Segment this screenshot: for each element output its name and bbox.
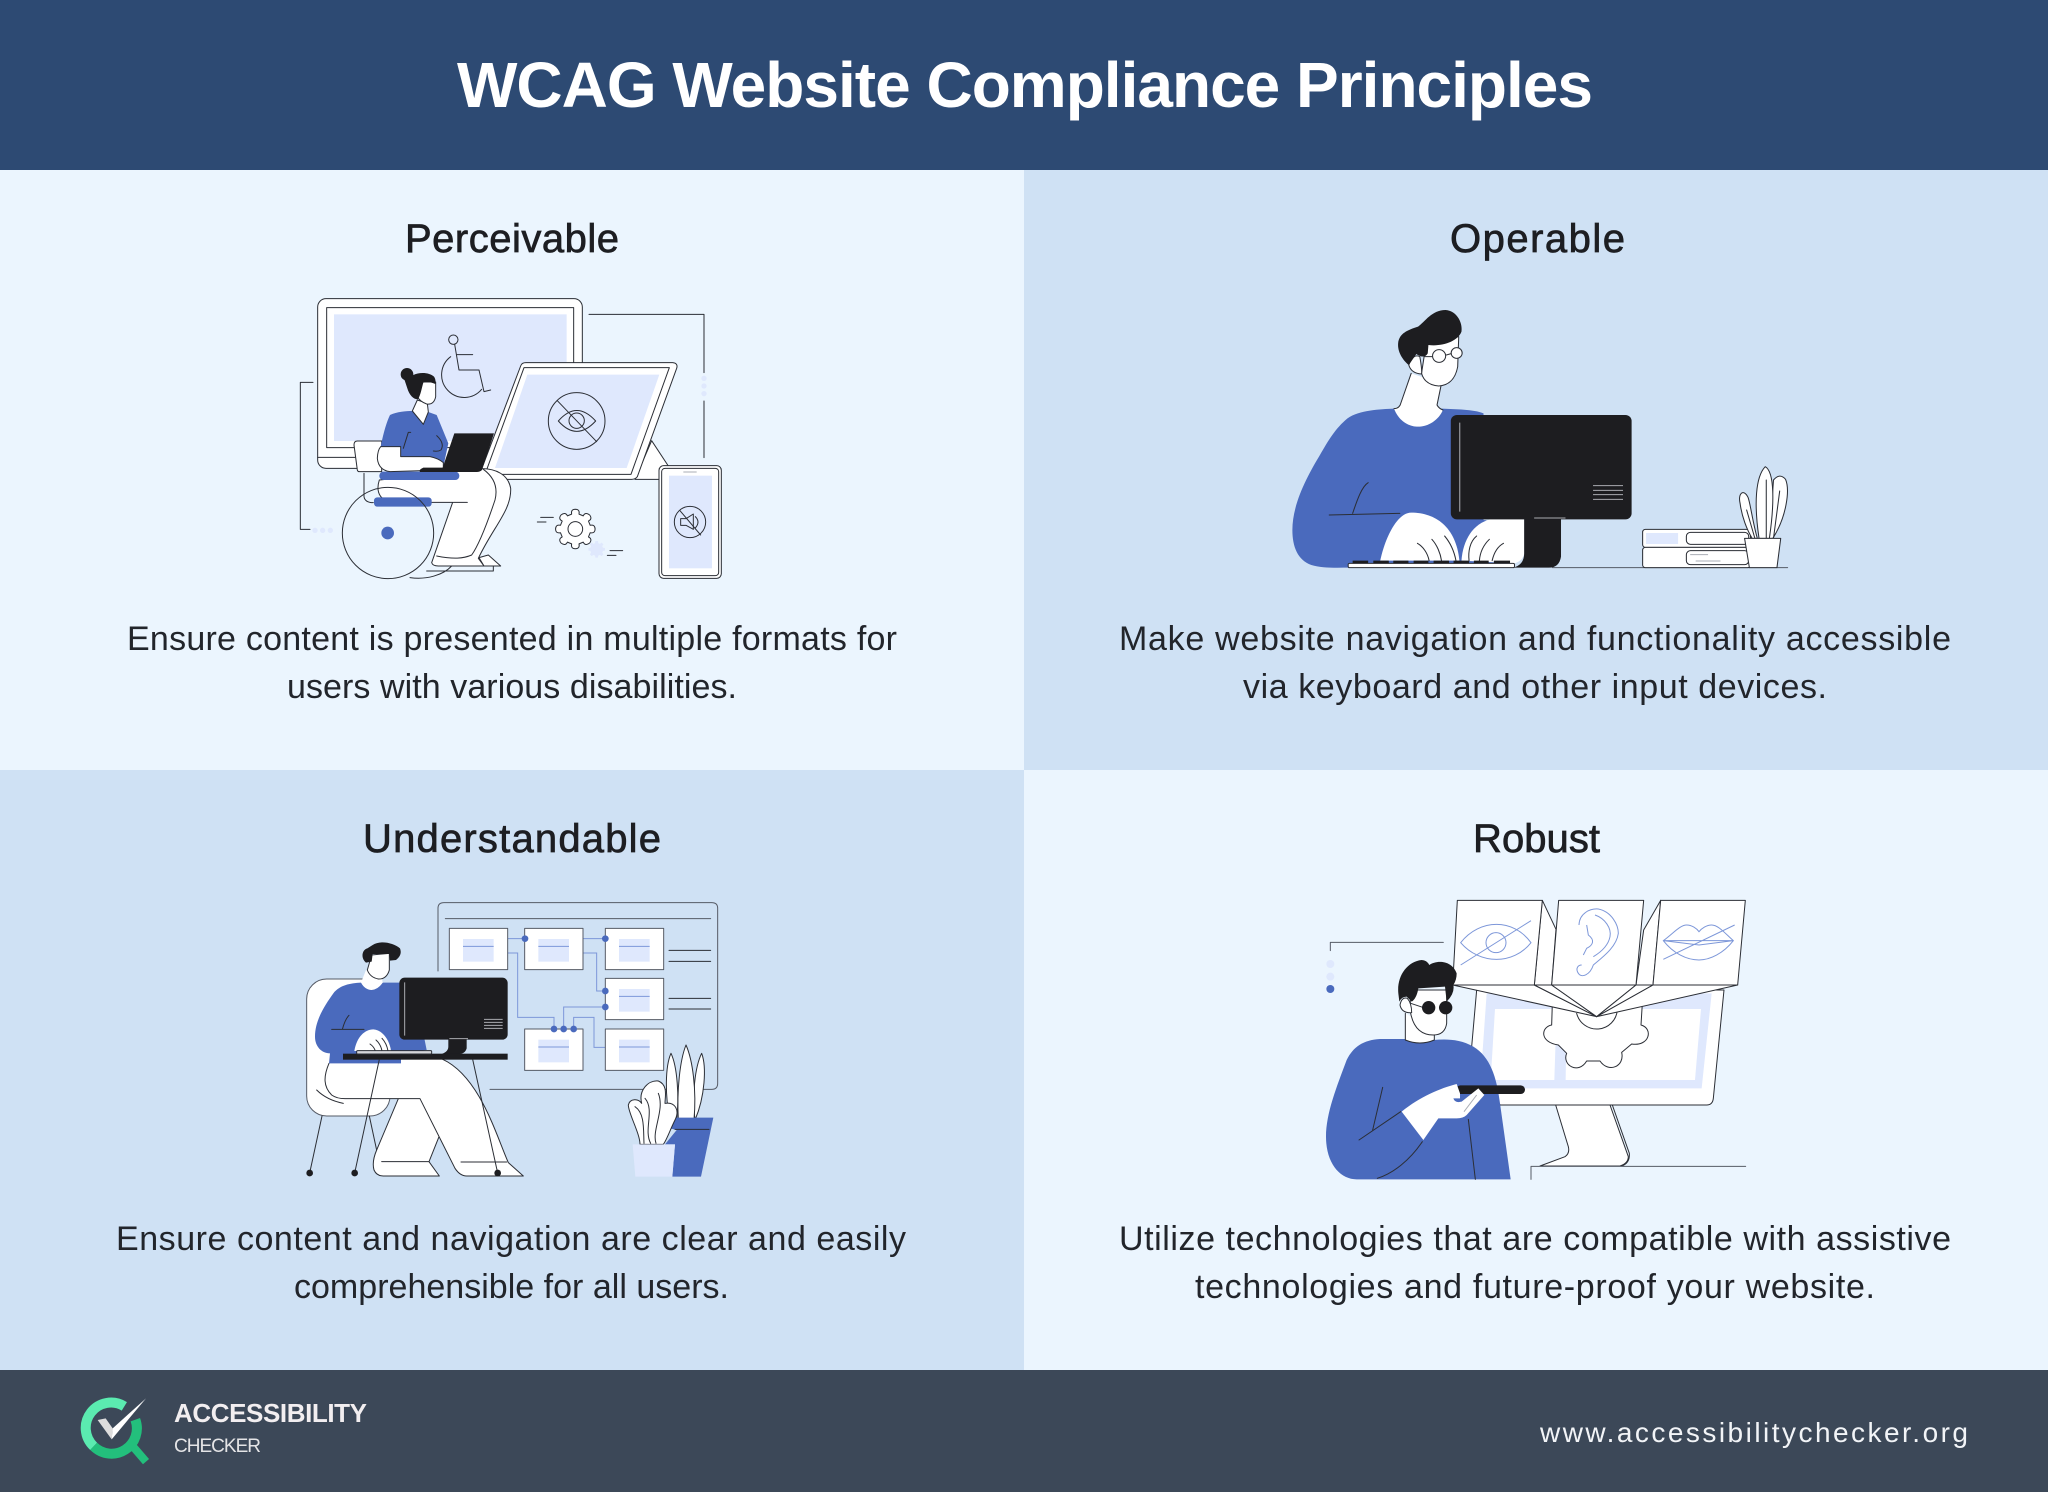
heading: understandable: Understandable — [363, 817, 661, 861]
man torso — [1326, 1039, 1511, 1179]
desk — [343, 1054, 508, 1060]
heading: robust: Robust — [1473, 817, 1600, 861]
logo wordmark — [174, 1398, 367, 1457]
plant — [1740, 467, 1787, 568]
description: robust — [1119, 1220, 1951, 1306]
icon: wheelchair symbol — [442, 335, 491, 397]
header band — [0, 0, 2048, 170]
ear — [1400, 998, 1412, 1013]
description: perceivable — [127, 620, 897, 706]
description: robust: technologies and future-proof your website. — [1195, 1268, 1875, 1306]
sleeve lines — [332, 1015, 364, 1029]
monitor stand and base — [1531, 1105, 1746, 1179]
title: WCAG Website Compliance Principles — [457, 49, 1593, 121]
bracket left — [300, 382, 313, 529]
illustration: person at desk with sitemap — [306, 903, 718, 1177]
monitor — [1472, 990, 1724, 1105]
description: operable: Make website navigation and functionality accessible — [1119, 620, 1951, 658]
description: understandable — [116, 1220, 906, 1306]
hand — [1402, 1084, 1484, 1140]
person in wheelchair — [342, 368, 511, 579]
connector nodes — [522, 935, 609, 1032]
ear — [1409, 356, 1422, 374]
description: understandable: Ensure content and navigation are clear and easily — [116, 1220, 906, 1258]
desk legs — [306, 1059, 501, 1176]
description: operable — [1119, 620, 1951, 706]
hand — [354, 1029, 391, 1051]
clothing lines — [1359, 1087, 1475, 1179]
bracket — [1330, 942, 1443, 951]
panel: perceivable — [0, 170, 1024, 770]
device — [1456, 1085, 1525, 1094]
monitor — [1451, 415, 1632, 568]
connectors — [508, 939, 605, 1047]
tilted tablet screen — [480, 363, 677, 479]
blue pot plant — [665, 1045, 713, 1177]
face — [1410, 990, 1447, 1035]
pale pot plant — [628, 1081, 677, 1177]
footer band — [0, 1370, 2048, 1492]
sleeve lines — [1329, 483, 1400, 515]
person legs — [317, 1059, 523, 1176]
ear panel — [1552, 900, 1644, 985]
sitemap cards — [449, 928, 664, 1070]
description: operable: via keyboard and other input devices. — [1243, 668, 1827, 706]
tablet stand — [635, 441, 668, 479]
decorative dots left — [312, 528, 333, 533]
phone — [659, 466, 721, 578]
converging rays — [1453, 985, 1738, 1017]
panel: understandable — [0, 770, 1024, 1370]
illustration: wheelchair user with devices — [300, 299, 721, 579]
panel: operable — [1024, 170, 2048, 770]
man torso — [1292, 409, 1511, 568]
lips panel — [1653, 900, 1745, 985]
hair — [1398, 310, 1462, 365]
keyboard — [1348, 561, 1515, 568]
icon: gear — [537, 509, 623, 558]
description: perceivable: Ensure content is presented in multiple formats for — [127, 620, 897, 658]
description: robust: Utilize technologies that are compatible with assistive — [1119, 1220, 1951, 1258]
face — [1422, 337, 1459, 386]
text lines — [669, 950, 711, 1009]
connector lines top right — [589, 314, 704, 458]
heading: perceivable: Perceivable — [405, 217, 619, 261]
glasses — [1425, 348, 1462, 362]
sunglasses — [1411, 1001, 1452, 1014]
gear — [1544, 1003, 1648, 1068]
description: understandable: comprehensible for all users. — [294, 1268, 729, 1306]
table line — [1552, 566, 1788, 569]
monitor on desk — [399, 978, 508, 1054]
decorative dots right — [701, 376, 707, 396]
stacked books — [1643, 529, 1750, 568]
finger line — [1464, 1095, 1477, 1112]
icon: muted speaker — [674, 506, 706, 538]
panel: robust — [1024, 770, 2048, 1370]
sitemap board — [438, 903, 718, 1089]
logo: magnifier check — [86, 1398, 146, 1462]
illustration: man typing at monitor — [1292, 310, 1788, 568]
keyboard — [357, 1051, 432, 1054]
hands — [1380, 513, 1524, 563]
logo wordmark: CHECKER — [174, 1436, 261, 1457]
heading: operable: Operable — [1450, 217, 1625, 261]
neck outline — [1405, 1013, 1434, 1043]
neck — [1405, 1013, 1434, 1043]
eye panel — [1453, 900, 1542, 985]
person neck and head — [361, 942, 401, 990]
chair — [307, 979, 390, 1173]
website url: www.accessibilitychecker.org — [1539, 1417, 1968, 1448]
icon: crossed eye — [548, 393, 605, 449]
panel flaps — [1534, 900, 1661, 985]
neck outline — [1394, 373, 1443, 410]
man neck — [1394, 373, 1443, 427]
person torso — [315, 983, 427, 1063]
large monitor — [318, 299, 582, 468]
illustration: man with cane and sensory panels — [1326, 900, 1746, 1179]
dots — [1326, 960, 1334, 993]
description: perceivable: users with various disabilities. — [287, 668, 737, 706]
hair — [1398, 960, 1457, 1002]
logo wordmark: ACCESSIBILITY — [174, 1398, 367, 1428]
